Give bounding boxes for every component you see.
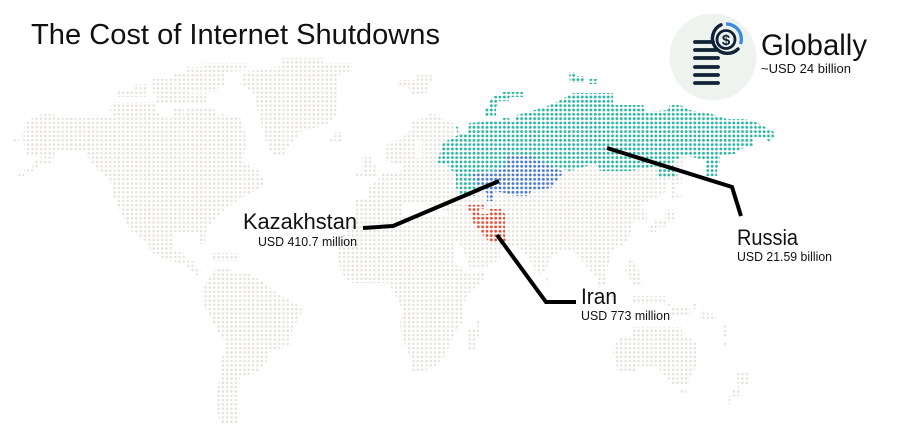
map: South-East Asia [545,258,716,319]
map: Madagascar [468,320,479,349]
coin with dollar sign [717,30,735,48]
icon background circle [670,14,756,100]
label: Kazakhstan: Kazakhstan [243,209,357,234]
region: Kazakhstan in blue [473,156,564,201]
region: Iran in red [467,205,509,243]
region: Russia in teal [437,93,774,196]
map: Pacific islands [722,325,749,404]
global figure: Globally [761,29,867,62]
coin ring [712,25,738,53]
map: Greenland [240,58,352,156]
map: Caribbean [212,253,238,261]
icon: money stack with coin [670,14,756,100]
map: United Kingdom [355,157,378,178]
label: Russia: USD 21.59 billion [737,250,832,264]
region: Russian Arctic islands [485,72,598,116]
map: Aleutian islands [12,138,40,176]
label: Iran: Iran [581,284,617,309]
label: Iran: USD 773 million [581,309,670,323]
map: North America [23,102,264,276]
label: Iran [581,284,670,323]
map: South America [202,269,303,424]
label: Russia [737,225,832,264]
map: Japan and Korea [648,178,682,232]
icon: money stack with coin: $ [722,32,731,49]
map: Australia [612,327,698,394]
global figure [761,29,867,76]
map: Europe, Asia and Africa [338,114,690,372]
map: Iceland [328,132,343,142]
global figure: ~USD 24 billion [761,62,851,76]
map: Svalbard [397,75,433,95]
label: Russia: Russia [737,225,799,250]
dot world map [12,58,749,424]
progress arc [726,24,741,44]
label: Kazakhstan: USD 410.7 million [258,235,357,249]
map: Arctic Canada [118,63,248,104]
leader line: Russia [607,148,741,216]
title: The Cost of Internet Shutdowns [31,19,440,51]
stack of coins [695,42,718,83]
label: Kazakhstan [243,209,357,249]
leader line: Kazakhstan [363,181,499,228]
leader line: Iran [497,235,576,302]
